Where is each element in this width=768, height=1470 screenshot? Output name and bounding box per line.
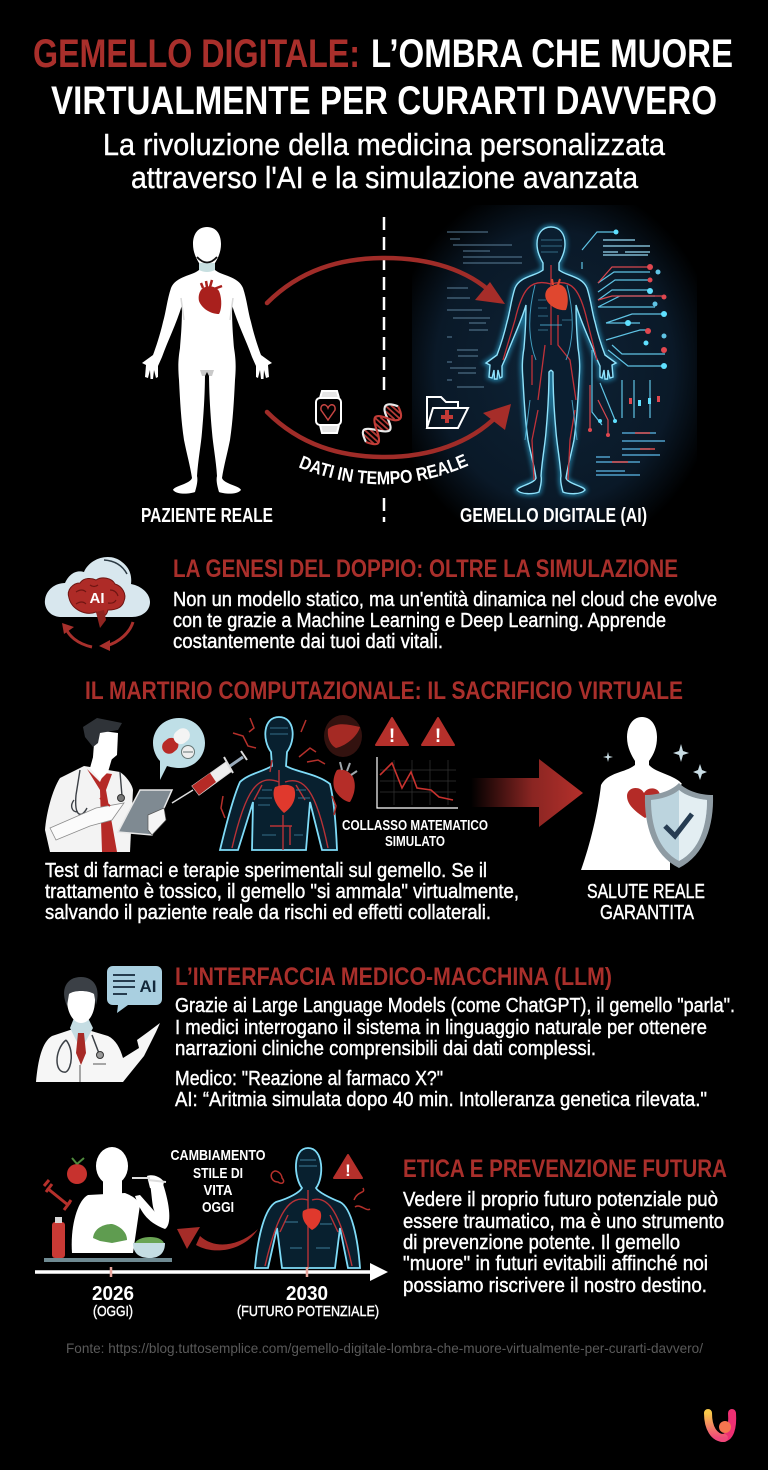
panel: twin background bbox=[412, 205, 697, 530]
text: martyrdom: trattamento è tossico, il gemello "si ammala" virtualmente, bbox=[45, 881, 519, 903]
label: 2030: 2030 bbox=[286, 1283, 328, 1305]
text: genesis: costantemente dai tuoi dati vitali. bbox=[173, 631, 443, 653]
label: 2026 bbox=[92, 1283, 134, 1320]
icon: sick twin bbox=[220, 717, 337, 850]
icon: AI cloud brain bbox=[45, 557, 150, 651]
icon: syringe bbox=[172, 751, 247, 803]
label: 2030 bbox=[237, 1283, 379, 1320]
text: martyrdom: salvando il paziente reale da rischi ed effetti collaterali. bbox=[45, 902, 491, 924]
title: GEMELLO DIGITALE: bbox=[33, 32, 360, 76]
text: interface: narrazioni cliniche comprensibili dai dati complessi. bbox=[175, 1038, 596, 1060]
text: ethics: Vedere il proprio futuro potenziale può bbox=[403, 1189, 718, 1211]
icon: AI speech bubble: AI bbox=[140, 977, 156, 996]
icon: smartwatch bbox=[316, 391, 341, 433]
arrow: bottom data arc bbox=[267, 404, 511, 457]
divider: dashed centre line bbox=[383, 217, 385, 522]
text: ethics: di prevenzione potente. Il gemello bbox=[403, 1232, 680, 1254]
label: guaranteed health bbox=[587, 881, 705, 924]
icon: digital twin bbox=[486, 227, 616, 494]
text: ethics bbox=[403, 1189, 724, 1297]
label: lifestyle change: CAMBIAMENTO bbox=[170, 1147, 266, 1164]
icon: AI cloud brain: AI bbox=[90, 590, 104, 607]
icon: AI speech bubble bbox=[107, 966, 162, 1013]
icon: warning triangle 2 bbox=[422, 718, 454, 747]
timeline bbox=[35, 1263, 388, 1281]
text: ethics: essere traumatico, ma è uno strumento bbox=[403, 1211, 724, 1233]
text: genesis bbox=[173, 589, 717, 653]
label: 2026: (OGGI) bbox=[93, 1303, 133, 1320]
subtitle: attraverso l'AI e la simulazione avanzata bbox=[131, 160, 639, 195]
label: collapse: COLLASSO MATEMATICO bbox=[342, 818, 488, 834]
arrow: back to today bbox=[177, 1227, 258, 1250]
logo bbox=[708, 1413, 732, 1438]
subtitle: La rivoluzione della medicina personalizzata bbox=[103, 127, 666, 162]
curved label: real-time data: DATI IN TEMPO REALE bbox=[299, 454, 468, 484]
text: martyrdom bbox=[45, 860, 519, 924]
icon: pills speech bubble bbox=[153, 718, 205, 780]
icon: real patient silhouette bbox=[142, 227, 272, 494]
icon: medical folder bbox=[427, 397, 468, 428]
text: dialogue: Medico: "Reazione al farmaco X?" bbox=[175, 1068, 443, 1090]
chart: mathematical collapse bbox=[377, 757, 458, 808]
icon: doctor with speech bubble bbox=[36, 977, 160, 1082]
label: 2026: 2026 bbox=[92, 1283, 134, 1305]
label: lifestyle change bbox=[170, 1147, 266, 1216]
icon: liver bbox=[324, 715, 362, 757]
label: 2030: (FUTURO POTENZIALE) bbox=[237, 1303, 379, 1320]
circuit nodes and bars bbox=[588, 230, 667, 475]
icon: protected person with shield bbox=[581, 717, 713, 870]
icon: warning triangle 1 bbox=[376, 718, 408, 747]
source: Fonte: https://blog.tuttosemplice.com/gemello-digitale-lombra-che-muore-virtualmente-per-curarti-davvero/ bbox=[66, 1340, 703, 1356]
text: interface: I medici interrogano il sistema in linguaggio naturale per ottenere bbox=[175, 1017, 707, 1039]
text: genesis: Non un modello statico, ma un'entità dinamica nel cloud che evolve bbox=[173, 589, 717, 611]
arrow: to guaranteed health bbox=[471, 759, 583, 827]
icon: DNA helix bbox=[359, 400, 405, 449]
icon: warning triangle 2: ! bbox=[435, 726, 441, 747]
icon: damaged heart bbox=[333, 762, 357, 802]
title bbox=[33, 32, 733, 123]
code panel lines bbox=[447, 232, 522, 387]
label: lifestyle change: STILE DI bbox=[193, 1165, 243, 1182]
icon: person eating healthy bbox=[44, 1147, 172, 1262]
label: lifestyle change: VITA bbox=[204, 1182, 233, 1199]
icon: future twin bbox=[255, 1148, 370, 1268]
label: real patient: PAZIENTE REALE bbox=[141, 505, 273, 527]
label: guaranteed health: SALUTE REALE bbox=[587, 881, 705, 903]
label: collapse bbox=[342, 818, 488, 850]
circuit traces bbox=[582, 232, 665, 425]
text: dialogue bbox=[175, 1068, 707, 1111]
text: ethics: "muore" in futuri evitabili affinché noi bbox=[403, 1253, 708, 1275]
text: dialogue: AI: “Aritmia simulata dopo 40 min. Intolleranza genetica rilevata." bbox=[175, 1089, 707, 1111]
label: lifestyle change: OGGI bbox=[202, 1199, 234, 1216]
text: ethics: possiamo riscrivere il nostro destino. bbox=[403, 1275, 707, 1297]
label: digital twin: GEMELLO DIGITALE (AI) bbox=[460, 505, 647, 527]
icon: doctor with tablet bbox=[45, 718, 172, 852]
subtitle bbox=[103, 127, 666, 195]
icon: warning triangle 1: ! bbox=[389, 726, 395, 747]
heading: genesis: LA GENESI DEL DOPPIO: OLTRE LA SIMULAZIONE bbox=[173, 555, 678, 583]
label: guaranteed health: GARANTITA bbox=[600, 902, 695, 924]
icon: future twin: ! bbox=[345, 1161, 351, 1180]
text: genesis: con te grazie a Machine Learning e Deep Learning. Apprende bbox=[173, 610, 666, 632]
text: interface bbox=[175, 995, 735, 1060]
arrow: top data arc bbox=[267, 258, 505, 304]
heading: interface: L’INTERFACCIA MEDICO-MACCHINA (LLM) bbox=[175, 963, 612, 991]
text: martyrdom: Test di farmaci e terapie sperimentali sul gemello. Se il bbox=[45, 860, 487, 882]
label: collapse: SIMULATO bbox=[385, 834, 445, 850]
